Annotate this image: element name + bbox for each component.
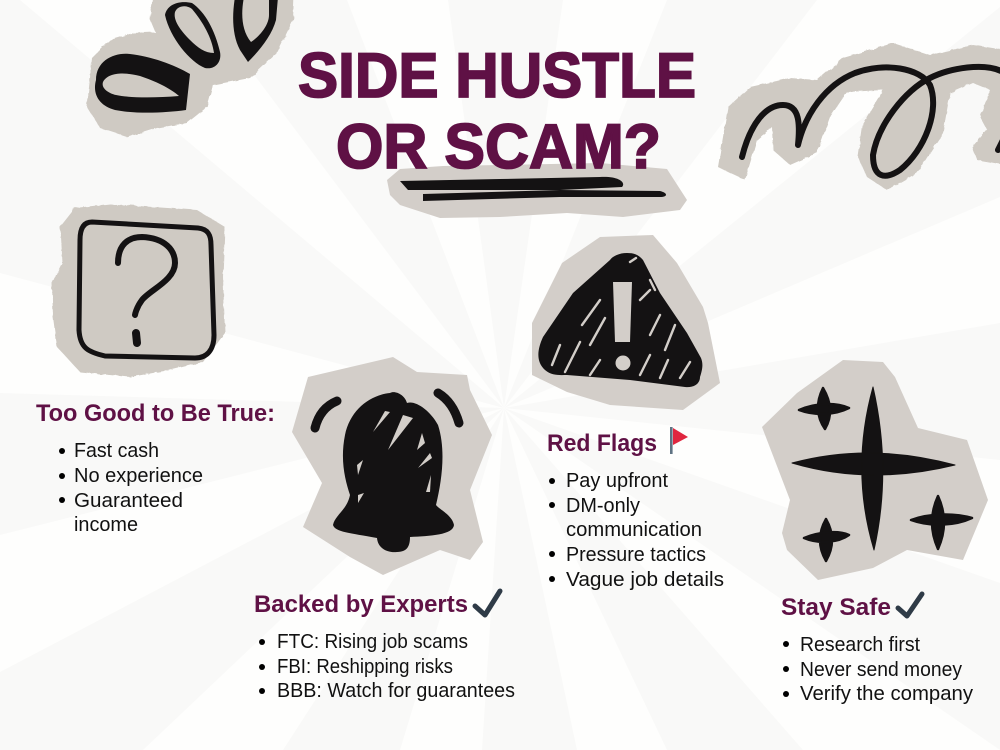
scrap: squiggle (718, 43, 1000, 190)
panel: backed by experts (254, 357, 515, 702)
panel: too good to be true (36, 204, 275, 536)
bullet list: Pressure tactics (566, 544, 706, 566)
bullet list (259, 631, 515, 702)
bullet list: Fast cash (74, 440, 159, 462)
bullet list: FBI: Reshipping risks (277, 656, 453, 678)
bullet list: Verify the company (800, 683, 973, 705)
bullet list (59, 440, 203, 536)
heading: Too Good to Be True: (36, 400, 275, 427)
bullet list: DM-only (566, 495, 640, 517)
heading: Red Flags (547, 430, 657, 457)
icon: check mark (898, 594, 922, 616)
bullet list: Guaranteed (74, 490, 183, 512)
icon: warning triangle scrap (532, 235, 720, 410)
icon: sparkles scrap (762, 360, 988, 580)
bullet list: income (74, 514, 138, 536)
heading: Stay Safe (781, 594, 891, 621)
icon: check mark (475, 591, 500, 615)
title (298, 41, 696, 182)
bullet list (549, 470, 724, 591)
title: SIDE HUSTLE (298, 41, 696, 111)
panel: red flags (532, 235, 724, 591)
bullet list: Pay upfront (566, 470, 668, 492)
icon: bell scrap (292, 357, 492, 575)
icon: red flag (670, 427, 688, 454)
scrap: underline strokes (387, 163, 687, 218)
bullet list: Never send money (800, 659, 962, 681)
heading: Backed by Experts (254, 591, 468, 618)
bullet list: communication (566, 519, 702, 541)
bullet list: No experience (74, 465, 203, 487)
bullet list (783, 634, 973, 705)
panel: stay safe (762, 360, 988, 705)
icon: question mark scrap (52, 204, 225, 377)
bullet list: FTC: Rising job scams (277, 631, 468, 653)
bullet list: BBB: Watch for guarantees (277, 680, 515, 702)
title: OR SCAM? (336, 112, 661, 182)
bullet list: Research first (800, 634, 920, 656)
scrap: hand-drawn ovals (87, 0, 294, 137)
bullet list: Vague job details (566, 569, 724, 591)
